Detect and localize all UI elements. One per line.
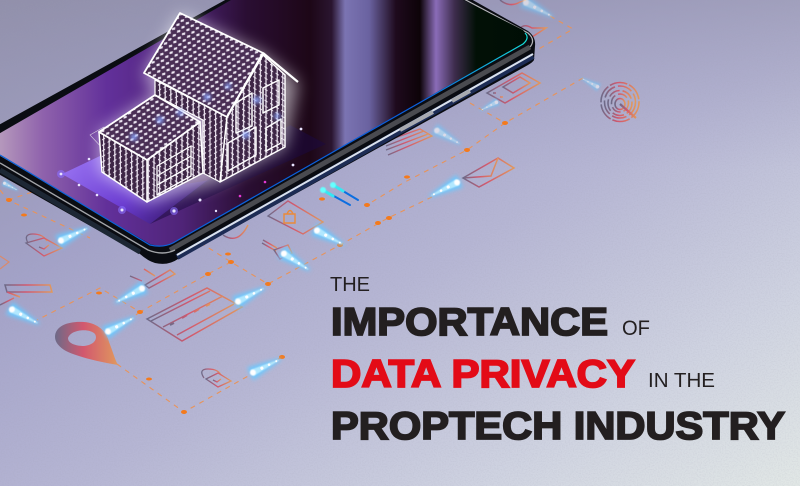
phone body bbox=[0, 0, 535, 264]
garage door bbox=[157, 146, 191, 195]
icon: padlock bottom bbox=[202, 369, 231, 387]
cyan streaks bbox=[320, 182, 358, 205]
smartphone bbox=[0, 0, 535, 264]
title word: OF: OF bbox=[622, 317, 650, 340]
icon: tablet bbox=[487, 73, 540, 103]
phone side strip bbox=[177, 56, 533, 257]
floor glow bbox=[62, 156, 210, 224]
dark floor plane bbox=[150, 125, 326, 224]
house glow bbox=[99, 13, 298, 202]
floor lights bbox=[57, 128, 302, 215]
wireframe house bbox=[99, 13, 298, 202]
roof overhang bbox=[227, 53, 298, 117]
main left wall bbox=[155, 80, 227, 182]
icon: key card bbox=[130, 269, 175, 288]
title line: PROPTECH INDUSTRY: PROPTECH INDUSTRY bbox=[331, 405, 785, 448]
title line: DATA PRIVACY: DATA PRIVACY bbox=[331, 353, 635, 396]
garage front wall bbox=[147, 122, 203, 202]
gable windows bbox=[228, 80, 281, 171]
icon: security camera bbox=[0, 285, 52, 305]
icon: envelope bbox=[463, 158, 514, 187]
title words: IN THE: IN THE bbox=[648, 369, 715, 392]
icon: arc bbox=[223, 225, 248, 238]
gable wall bbox=[220, 55, 285, 182]
blue house sparkles bbox=[130, 83, 280, 140]
title bbox=[330, 273, 785, 448]
orange network nodes bbox=[6, 121, 508, 414]
icon: location pin bbox=[55, 322, 118, 365]
phone buttons bbox=[400, 91, 470, 130]
dashed network lines bbox=[0, 16, 583, 412]
garage roof bbox=[99, 95, 200, 160]
icon: padlock upper left bbox=[26, 234, 62, 256]
icon: browser panel bbox=[147, 288, 242, 341]
fragment icon at left edge bbox=[0, 256, 9, 269]
icon: key bbox=[262, 240, 292, 259]
blue light beams bbox=[1, 0, 601, 380]
icon: lock card bbox=[268, 201, 323, 234]
title line: IMPORTANCE: IMPORTANCE bbox=[331, 301, 608, 344]
screen edge highlight bbox=[0, 33, 527, 246]
title line: THE: THE bbox=[330, 273, 370, 296]
icon: top right key bbox=[500, 0, 546, 37]
icon: document stack bbox=[386, 129, 432, 155]
phone screen bbox=[0, 0, 526, 246]
garage side wall bbox=[99, 132, 147, 202]
icon: fingerprint bbox=[601, 82, 639, 122]
floor outline bbox=[90, 127, 104, 150]
main roof bbox=[144, 13, 263, 117]
